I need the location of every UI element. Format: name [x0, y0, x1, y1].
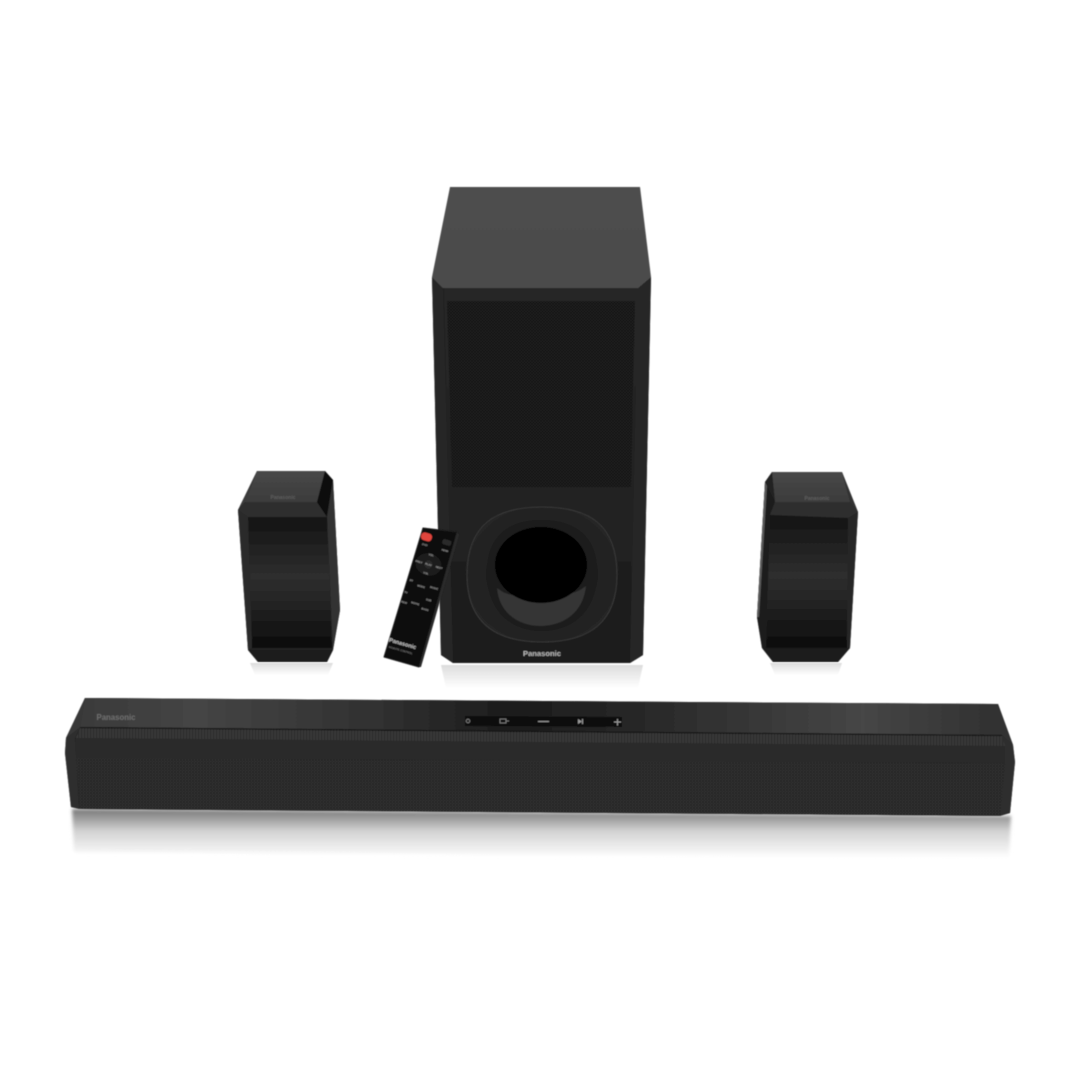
- subwoofer grille: [447, 301, 635, 487]
- soundbar logo: Panasonic: [96, 713, 136, 722]
- right speaker front: [766, 515, 848, 648]
- subwoofer reflection: [441, 665, 643, 688]
- remote labels: [400, 541, 450, 613]
- subwoofer top face: [432, 187, 651, 288]
- control play icon: [578, 719, 583, 724]
- subwoofer body: [432, 277, 651, 663]
- remote labels: VOL: [428, 552, 435, 558]
- soundbar upper grille: [76, 728, 1005, 746]
- remote navigation ring: [413, 550, 444, 579]
- remote body: [384, 528, 457, 667]
- power button: [420, 532, 433, 542]
- soundbar top face: [76, 698, 1002, 735]
- remote labels: SUB: [426, 597, 432, 603]
- soundbar front grille: [76, 758, 1005, 816]
- remote labels: HDMI: [441, 548, 449, 553]
- remote labels: DVD: [422, 542, 428, 547]
- remote labels: NEXT: [435, 565, 443, 570]
- right speaker body: [757, 472, 858, 662]
- soundbar body: [65, 698, 1015, 816]
- subwoofer front panel: [444, 288, 638, 663]
- remote labels: TV: [404, 590, 408, 595]
- port surround: [467, 507, 617, 642]
- left speaker logo: Panasonic: [270, 495, 296, 501]
- remote labels: MUSIC: [430, 585, 439, 591]
- remote labels: BT: [409, 578, 414, 583]
- remote control: REMOTE CONTROL: [388, 645, 414, 656]
- soundbar middle band: [76, 738, 1005, 763]
- remote side edge: [419, 532, 459, 667]
- subwoofer bass port: [467, 507, 617, 642]
- subwoofer logo: Panasonic: [523, 649, 561, 658]
- left speaker chamfer: [238, 502, 327, 517]
- control plus icon: [614, 719, 621, 726]
- port opening: [495, 527, 587, 603]
- right rear speaker: [757, 472, 858, 675]
- soundbar reflection: [72, 809, 1011, 858]
- soundbar control panel: [465, 716, 622, 727]
- left rear speaker: [238, 471, 340, 675]
- left speaker top face: [245, 471, 325, 502]
- right speaker reflection: [770, 663, 842, 675]
- remote labels: VOL: [423, 570, 430, 576]
- right speaker left facet: [757, 482, 775, 648]
- port lower lip: [497, 586, 586, 626]
- remote top button: [442, 539, 452, 546]
- control minus icon: [538, 721, 549, 722]
- soundbar left end cap: [65, 698, 85, 809]
- remote logo: Panasonic: [388, 638, 417, 651]
- soundbar: [65, 698, 1015, 858]
- remote labels: REW: [401, 599, 408, 605]
- left speaker reflection: [250, 663, 333, 675]
- right speaker chamfer: [770, 502, 858, 518]
- left speaker body: [238, 471, 340, 662]
- control source icon: [500, 719, 506, 723]
- left speaker front: [248, 517, 332, 648]
- port inner recess: [487, 520, 597, 631]
- remote labels: BASS: [421, 606, 429, 612]
- right speaker logo: Panasonic: [804, 496, 830, 502]
- right speaker top face: [772, 472, 850, 502]
- subwoofer: [432, 187, 651, 688]
- remote labels: PREV: [415, 559, 423, 565]
- control panel background: [465, 716, 622, 727]
- remote control: [384, 528, 459, 667]
- soundbar right end cap: [998, 704, 1015, 816]
- remote labels: MODE: [417, 583, 426, 589]
- control power icon: [466, 719, 470, 723]
- remote labels: PLAY: [425, 562, 433, 567]
- remote labels: MOVIE: [411, 600, 420, 606]
